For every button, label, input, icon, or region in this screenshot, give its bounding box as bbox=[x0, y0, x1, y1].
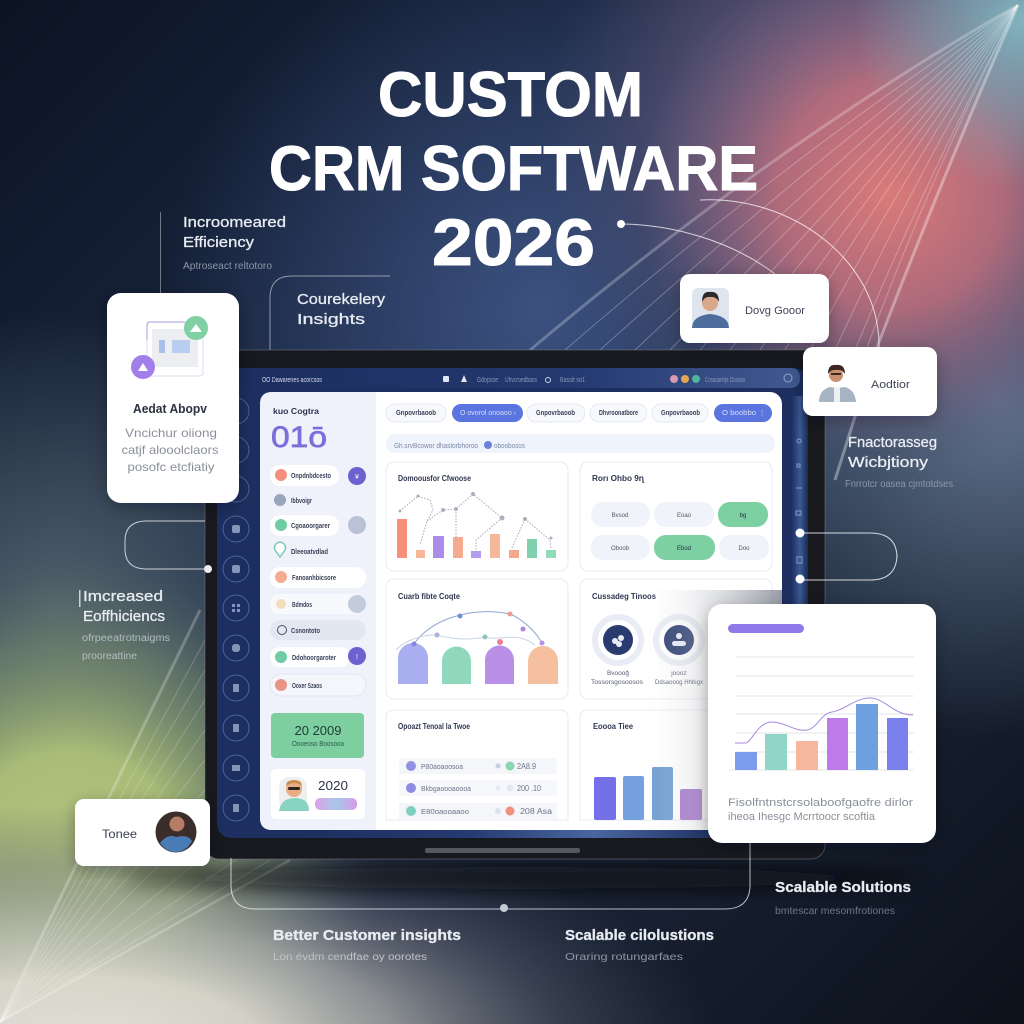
floating bottom line connector bbox=[231, 843, 750, 912]
filter tabs: O boobbo ⋮ bbox=[722, 410, 766, 417]
filter tabs: O ovorol onoaoo › bbox=[460, 410, 517, 417]
icon: avatar man bbox=[692, 288, 729, 328]
dashboard left column bbox=[260, 392, 376, 830]
card: ring indicators bbox=[580, 579, 772, 699]
menu item 8 bbox=[270, 647, 366, 667]
filter tabs: Gnpovrbaoob bbox=[396, 410, 436, 417]
icon: window with badges bbox=[131, 316, 208, 379]
callout: left text bbox=[79, 588, 170, 662]
card: about bbox=[107, 293, 239, 503]
callout: scalable solutions right: Scalable Solutions bbox=[775, 879, 911, 896]
right connector loop bbox=[796, 528, 897, 584]
green stat card bbox=[271, 713, 364, 758]
callout: left text: ofrpeeatrotnaigms bbox=[82, 633, 170, 644]
menu item 9 bbox=[270, 674, 366, 696]
callout: left text: prooreattine bbox=[82, 651, 137, 662]
profile stat card: 2020 bbox=[318, 778, 348, 793]
callout: left text: Imcreased bbox=[83, 588, 163, 605]
callout: customer insights top: Courekelery bbox=[297, 291, 386, 308]
menu item 4 bbox=[274, 542, 328, 557]
connector curves from title bbox=[617, 200, 879, 347]
filter tabs: Dhvroonatbore bbox=[599, 410, 638, 417]
bars bbox=[397, 519, 556, 558]
arc connectors bbox=[396, 612, 544, 650]
kpi number: 01ō bbox=[271, 421, 327, 454]
top bar: Gdopsse bbox=[477, 377, 498, 384]
callout: better customer insights: Lon évdm cendfae oy oorotes bbox=[273, 952, 427, 963]
callout: customer insights top: Insights bbox=[297, 311, 365, 328]
card: status pills: Bvsod bbox=[612, 513, 628, 519]
top bar: Cosasanhja Oosnsa bbox=[705, 377, 745, 384]
ring 1 bbox=[591, 617, 644, 686]
card: list table: Bkbgaoooaoooa bbox=[421, 786, 471, 793]
card: list table: 200 .10 bbox=[517, 784, 541, 793]
right icon rail bbox=[792, 396, 808, 605]
menu item 3 bbox=[270, 515, 366, 536]
title: CRM SOFTWARE bbox=[269, 134, 758, 204]
card: status pills: Rorı Ohbo 9ղ bbox=[592, 474, 645, 483]
arches bbox=[398, 643, 558, 684]
card: ring indicators: Cussadeg Tinoos bbox=[592, 592, 657, 601]
callout: better customer insights: Better Customer insights bbox=[273, 927, 461, 944]
bars bbox=[735, 704, 908, 770]
caption: Fisolfntnstcrsolaboofgaofre dirlor bbox=[728, 797, 913, 809]
card: profile doug bbox=[680, 274, 829, 343]
green stat card: Oooeoso Boosooa bbox=[292, 741, 344, 748]
ring 2 bbox=[655, 617, 704, 686]
laptop body bbox=[205, 350, 825, 859]
callout: scalable solutions middle: Scalable cilolustions bbox=[565, 927, 714, 944]
menu item 8: Ddohoorgaroter bbox=[292, 655, 336, 662]
filter tabs: Gnpovrbaoob bbox=[536, 410, 575, 417]
left connector loop bbox=[125, 521, 212, 573]
card: profile author: Aodtior bbox=[871, 379, 910, 391]
panel shade near floating card bbox=[640, 590, 782, 830]
search bar bbox=[386, 434, 775, 453]
callout: scalable solutions middle: Oraring rotungarfaes bbox=[565, 952, 683, 963]
card: list table: P80aoaoosoa bbox=[421, 764, 463, 771]
ring 1: Tossorsgosoosos bbox=[591, 679, 644, 686]
icon: round avatar bbox=[156, 812, 196, 852]
screen bottom strip bbox=[300, 830, 720, 838]
caption: iheoa Ihesgc Mcrrtoocr scoftia bbox=[728, 811, 876, 823]
top bar: Uhvcroedbass bbox=[505, 377, 537, 384]
card: about: Vncichur oiiong bbox=[125, 426, 217, 440]
ring 2: Ddsaooog Hhbigx bbox=[655, 679, 704, 686]
card: list table: 208 Asa bbox=[520, 807, 553, 816]
card: list table bbox=[386, 710, 568, 820]
menu item 6: Bdmdos bbox=[292, 602, 312, 609]
card: bar chart with dotted links bbox=[386, 462, 568, 571]
filter tabs: Gnpovrbaoob bbox=[661, 410, 700, 417]
title: 2026 bbox=[432, 205, 595, 279]
filter tabs bbox=[386, 404, 772, 422]
menu item 7 bbox=[270, 620, 366, 640]
icon: profile photo bbox=[279, 777, 309, 811]
menu item 7: Csnontoto bbox=[291, 628, 320, 635]
card: list table: E80oaooaaoo bbox=[421, 809, 469, 816]
search bar: oboobosos bbox=[494, 443, 525, 450]
menu item 6 bbox=[270, 594, 366, 614]
card: status pills: Doo bbox=[738, 546, 750, 552]
card: profile tonee: Tonee bbox=[102, 827, 137, 841]
search bar: Gh.srvBcowor dhastorbhoroo bbox=[394, 443, 478, 450]
card: bar chart with dotted links: Domoousfor Cfwoose bbox=[398, 474, 471, 483]
card: profile doug: Dovg Gooor bbox=[745, 305, 805, 317]
card: arch chart bbox=[386, 579, 568, 699]
trend line bbox=[735, 698, 913, 743]
caption bbox=[728, 797, 913, 823]
menu item 2: Ibbvoigr bbox=[291, 498, 312, 505]
menu item 3: Cgoaoorgarer bbox=[291, 523, 330, 530]
card: status pills: Oboob bbox=[611, 546, 630, 552]
card: list table: 2A8.9 bbox=[517, 762, 537, 771]
menu item 8: ! bbox=[356, 654, 358, 661]
chart title bar bbox=[728, 624, 804, 633]
card: status pills: Eoao bbox=[677, 513, 692, 519]
callout: increased efficiency top: Aptroseact reltotoro bbox=[183, 261, 272, 272]
dotted connectors bbox=[398, 492, 552, 550]
ring 2: joooz bbox=[670, 670, 687, 677]
menu item 5: Fanoanhbicsore bbox=[292, 575, 336, 582]
laptop hinge notch bbox=[425, 848, 580, 853]
card: mini bars: Eoooa Tiee bbox=[593, 722, 634, 731]
card: status pills: Ebod bbox=[677, 546, 691, 552]
menu item 1 bbox=[270, 465, 366, 486]
decorative light fan top right bbox=[530, 5, 1018, 480]
laptop bbox=[205, 350, 825, 859]
screen bbox=[217, 368, 808, 838]
callout: increased efficiency top: Efficiency bbox=[183, 234, 255, 251]
profile stat card bbox=[271, 769, 365, 819]
card: arch chart: Cuarb fibte Coqte bbox=[398, 592, 461, 601]
card: mini bars bbox=[580, 710, 772, 820]
icon: avatar suit bbox=[819, 365, 856, 402]
card: list table: Opoazt Tenoal la Twoe bbox=[398, 722, 470, 731]
menu item 4: Dleeoatvdlad bbox=[291, 549, 328, 556]
menu item 1: ¥ bbox=[355, 474, 359, 481]
top bar: Bassit so1 bbox=[560, 377, 585, 384]
callout: customer insights top bbox=[270, 276, 390, 355]
card: about: catjf alooolclaors bbox=[122, 443, 218, 457]
callout: right text: Fnrrotcr oasea cjmtotdses bbox=[845, 479, 953, 490]
card: about: Aedat Abopv bbox=[133, 401, 208, 416]
left icon rail bbox=[223, 398, 249, 821]
menu item 1: Onpdnbdcesto bbox=[291, 473, 331, 480]
menu item 2 bbox=[274, 494, 312, 506]
card: status pills bbox=[580, 462, 772, 571]
ring 1: Bvoooğ bbox=[607, 670, 629, 677]
top bar bbox=[217, 368, 800, 388]
callout: increased efficiency top bbox=[160, 212, 286, 293]
callout: right text: Wicbjtiony bbox=[848, 454, 929, 471]
callout: left text: Eoffhiciencs bbox=[83, 608, 165, 625]
card: profile author bbox=[803, 347, 937, 416]
green stat card: 20 2009 bbox=[294, 723, 342, 738]
main dashboard panel bbox=[260, 392, 782, 830]
card: profile tonee bbox=[75, 799, 210, 866]
card: status pills: bg bbox=[740, 513, 746, 519]
callout: scalable solutions right bbox=[775, 879, 911, 917]
callout: scalable solutions right: bmtescar mesomfrotiones bbox=[775, 906, 895, 917]
callout: scalable solutions middle bbox=[565, 927, 714, 963]
callout: better customer insights bbox=[273, 927, 461, 963]
callout: right text: Fnactorasseg bbox=[848, 434, 937, 451]
grid lines bbox=[729, 657, 914, 770]
decorative light fan bottom left bbox=[0, 610, 290, 1022]
menu item 9: Ooxer Szaos bbox=[292, 683, 322, 690]
card: floating bar chart bbox=[708, 604, 936, 843]
kpi heading: kuo Cogtra bbox=[273, 407, 320, 416]
laptop shadow bbox=[120, 867, 920, 889]
card: about: posofc etcfiatiy bbox=[128, 460, 214, 474]
callout: increased efficiency top: Incroomeared bbox=[183, 214, 286, 231]
callout: right text bbox=[845, 434, 953, 490]
title bbox=[269, 60, 758, 279]
top bar: OO Dawarenes acorcsos bbox=[262, 377, 322, 384]
menu item 5 bbox=[270, 567, 366, 588]
title: CUSTOM bbox=[378, 60, 643, 130]
